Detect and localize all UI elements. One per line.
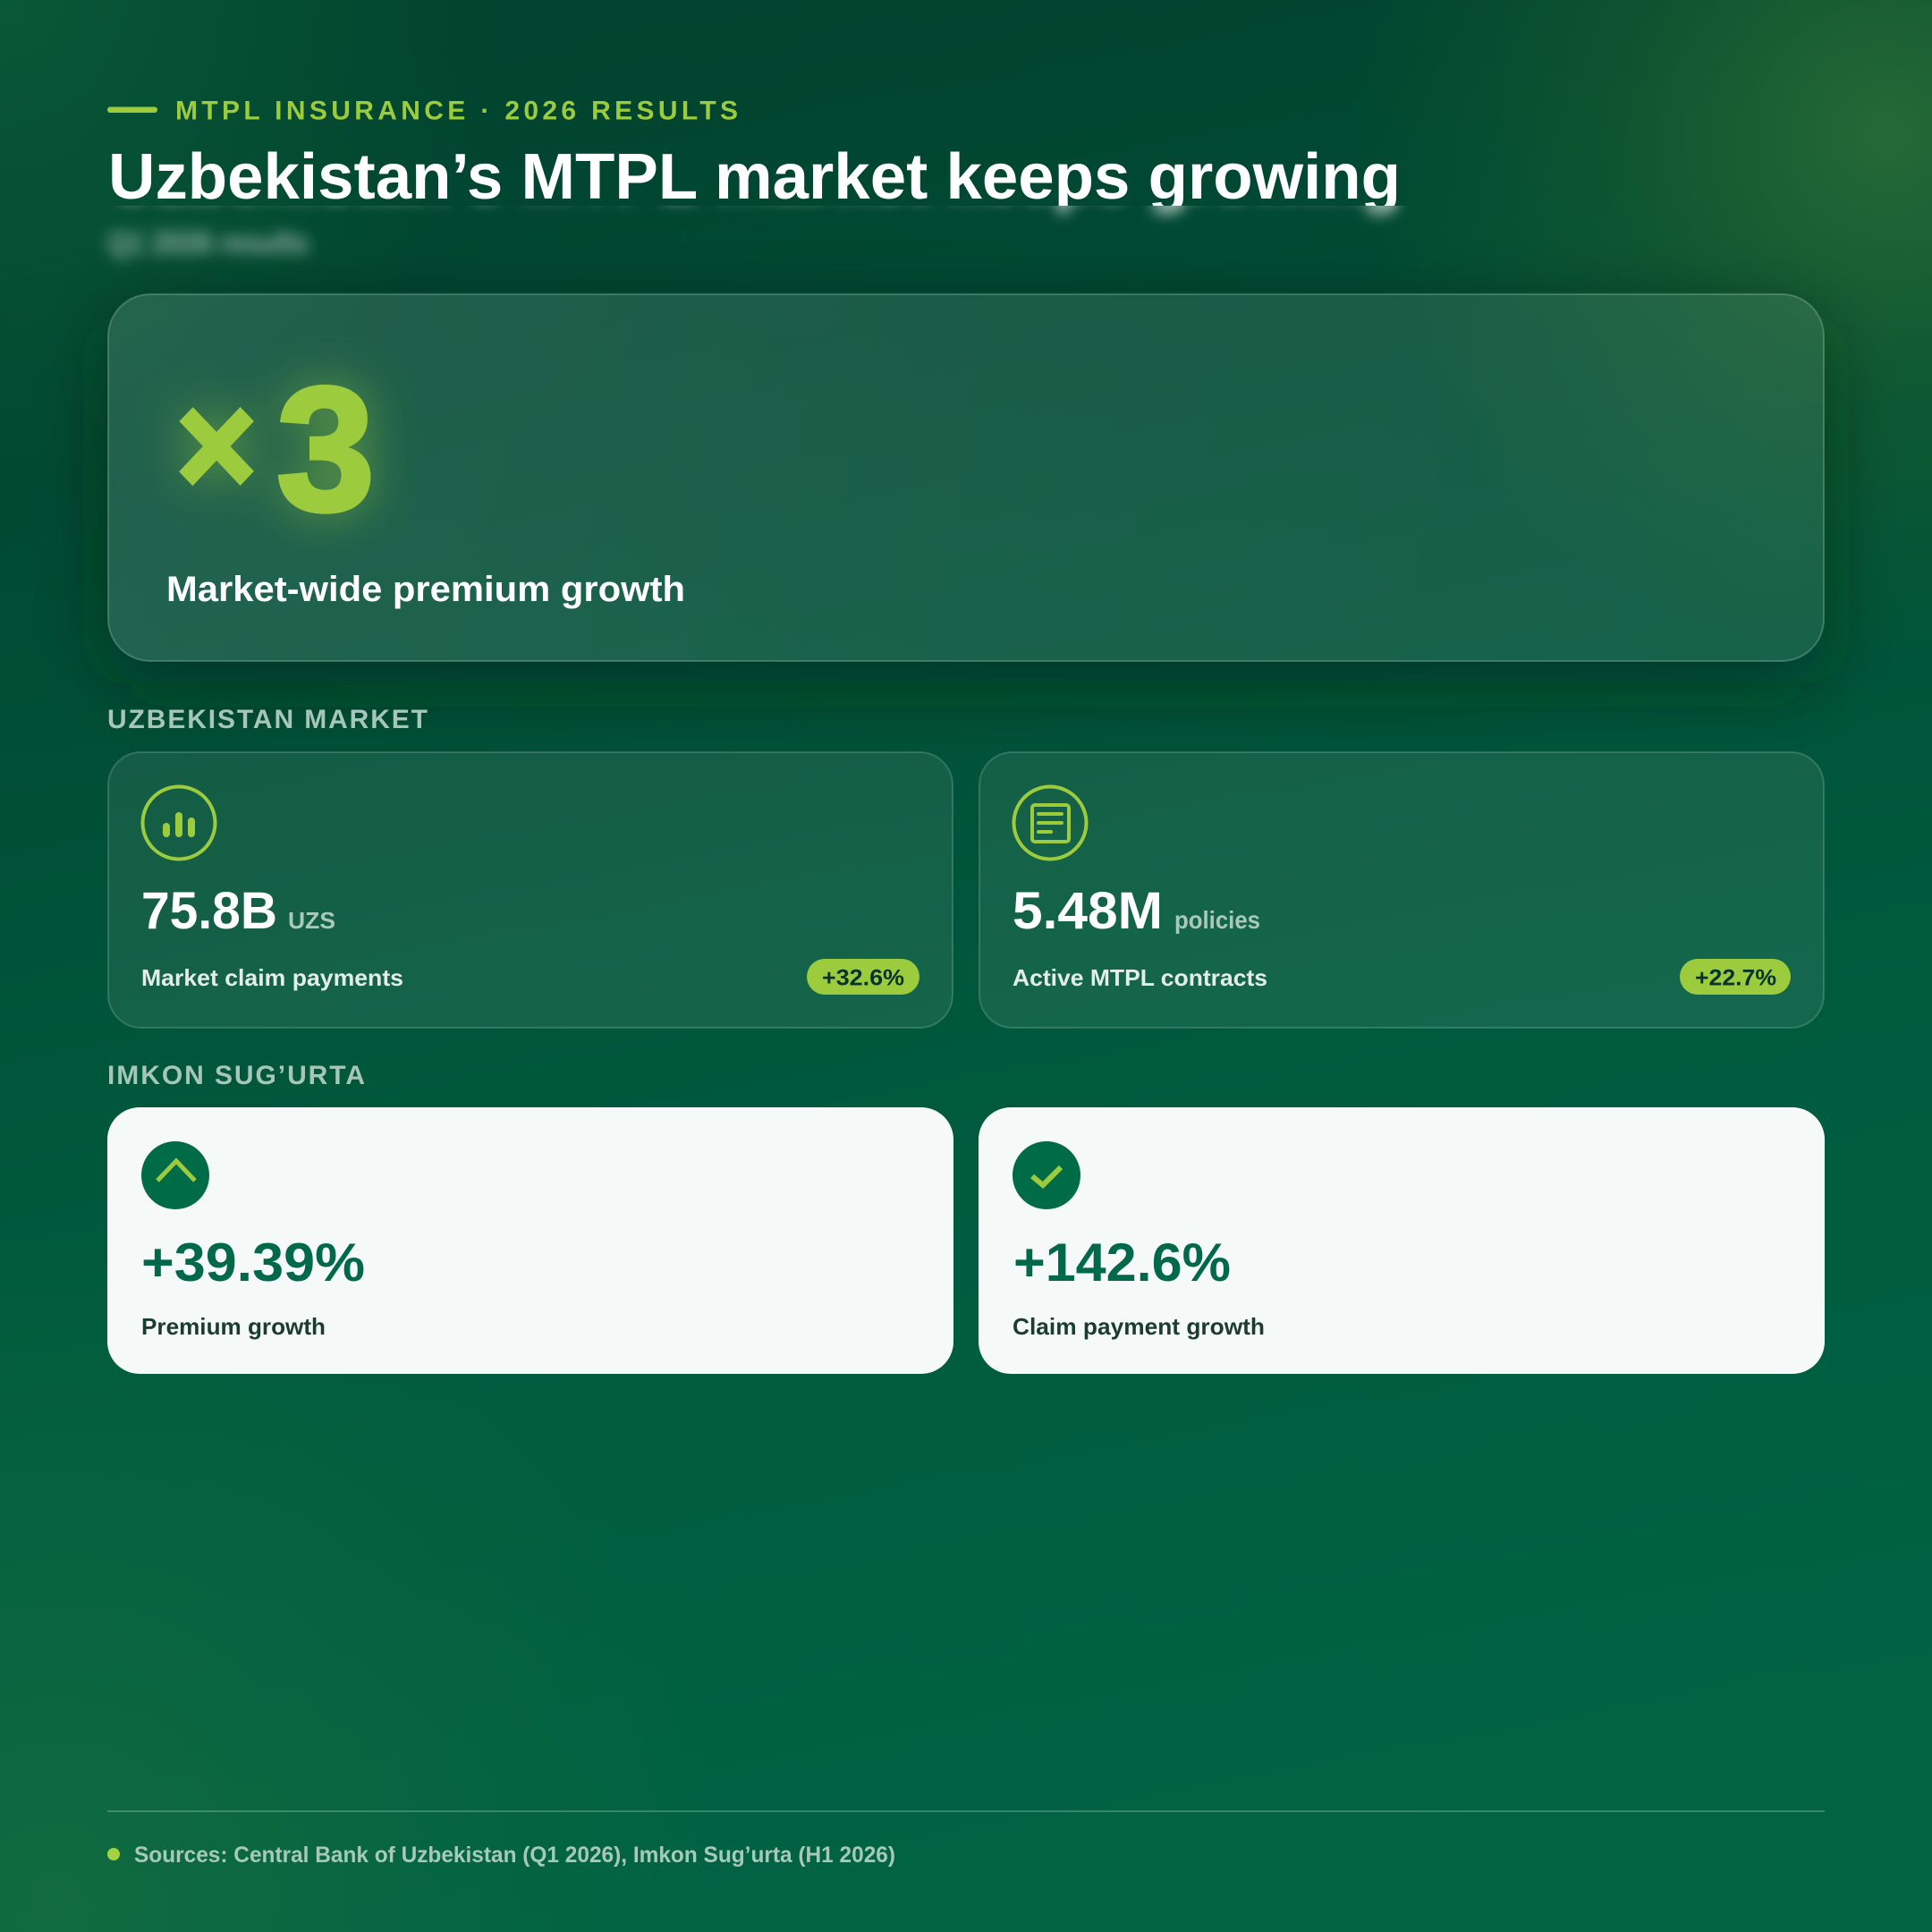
blurred title reflection: Uzbekistan’s MTPL market keeps growing — [108, 141, 1401, 213]
unit: policies — [1174, 906, 1260, 934]
growth badge: +32.6% — [822, 966, 904, 991]
hero panel shadow — [107, 315, 1825, 683]
eyebrow text: MTPL INSURANCE · 2026 RESULTS — [175, 97, 738, 125]
label: Claim payment growth — [1013, 1313, 1265, 1340]
value: +39.39% — [141, 1233, 365, 1292]
big number: times three: × — [176, 364, 257, 526]
growth badge — [807, 959, 919, 995]
header — [107, 97, 1401, 260]
icon: bar chart — [143, 787, 215, 859]
value: 5.48M — [1013, 882, 1163, 940]
title: Uzbekistan’s MTPL market keeps growing — [108, 141, 1401, 213]
value: 75.8B — [141, 882, 277, 940]
icon: chevron up — [141, 1141, 209, 1209]
section heading: Uzbekistan market: UZBEKISTAN MARKET — [107, 705, 428, 734]
sources: Sources: Central Bank of Uzbekistan (Q1 2026), Imkon Sug’urta (H1 2026) — [134, 1843, 895, 1868]
growth badge — [1680, 959, 1791, 995]
label: Premium growth — [141, 1313, 326, 1340]
panel: active contracts — [979, 752, 1824, 1028]
hero label: Market-wide premium growth — [166, 570, 685, 609]
panel: hero — [108, 294, 1824, 661]
value: +142.6% — [1013, 1233, 1231, 1292]
footer dot — [107, 1848, 120, 1860]
blurred subtitle: Q1 2026 results — [108, 226, 309, 260]
big number: times three: 3 — [276, 351, 375, 547]
eyebrow accent bar — [107, 107, 157, 113]
icon: check mark — [1013, 1141, 1080, 1209]
icon: document — [1014, 787, 1086, 859]
panel: claim payment growth — [979, 1107, 1825, 1374]
unit: UZS — [288, 907, 335, 934]
footer — [107, 1811, 1825, 1868]
label: Market claim payments — [141, 964, 403, 991]
big number: times three — [176, 351, 375, 547]
panel: premium growth — [107, 1107, 953, 1374]
section heading: Imkon Sug'urta: IMKON SUG’URTA — [107, 1061, 365, 1090]
panel: market claim payments — [108, 752, 953, 1028]
growth badge: +22.7% — [1695, 966, 1776, 991]
label: Active MTPL contracts — [1013, 964, 1267, 991]
